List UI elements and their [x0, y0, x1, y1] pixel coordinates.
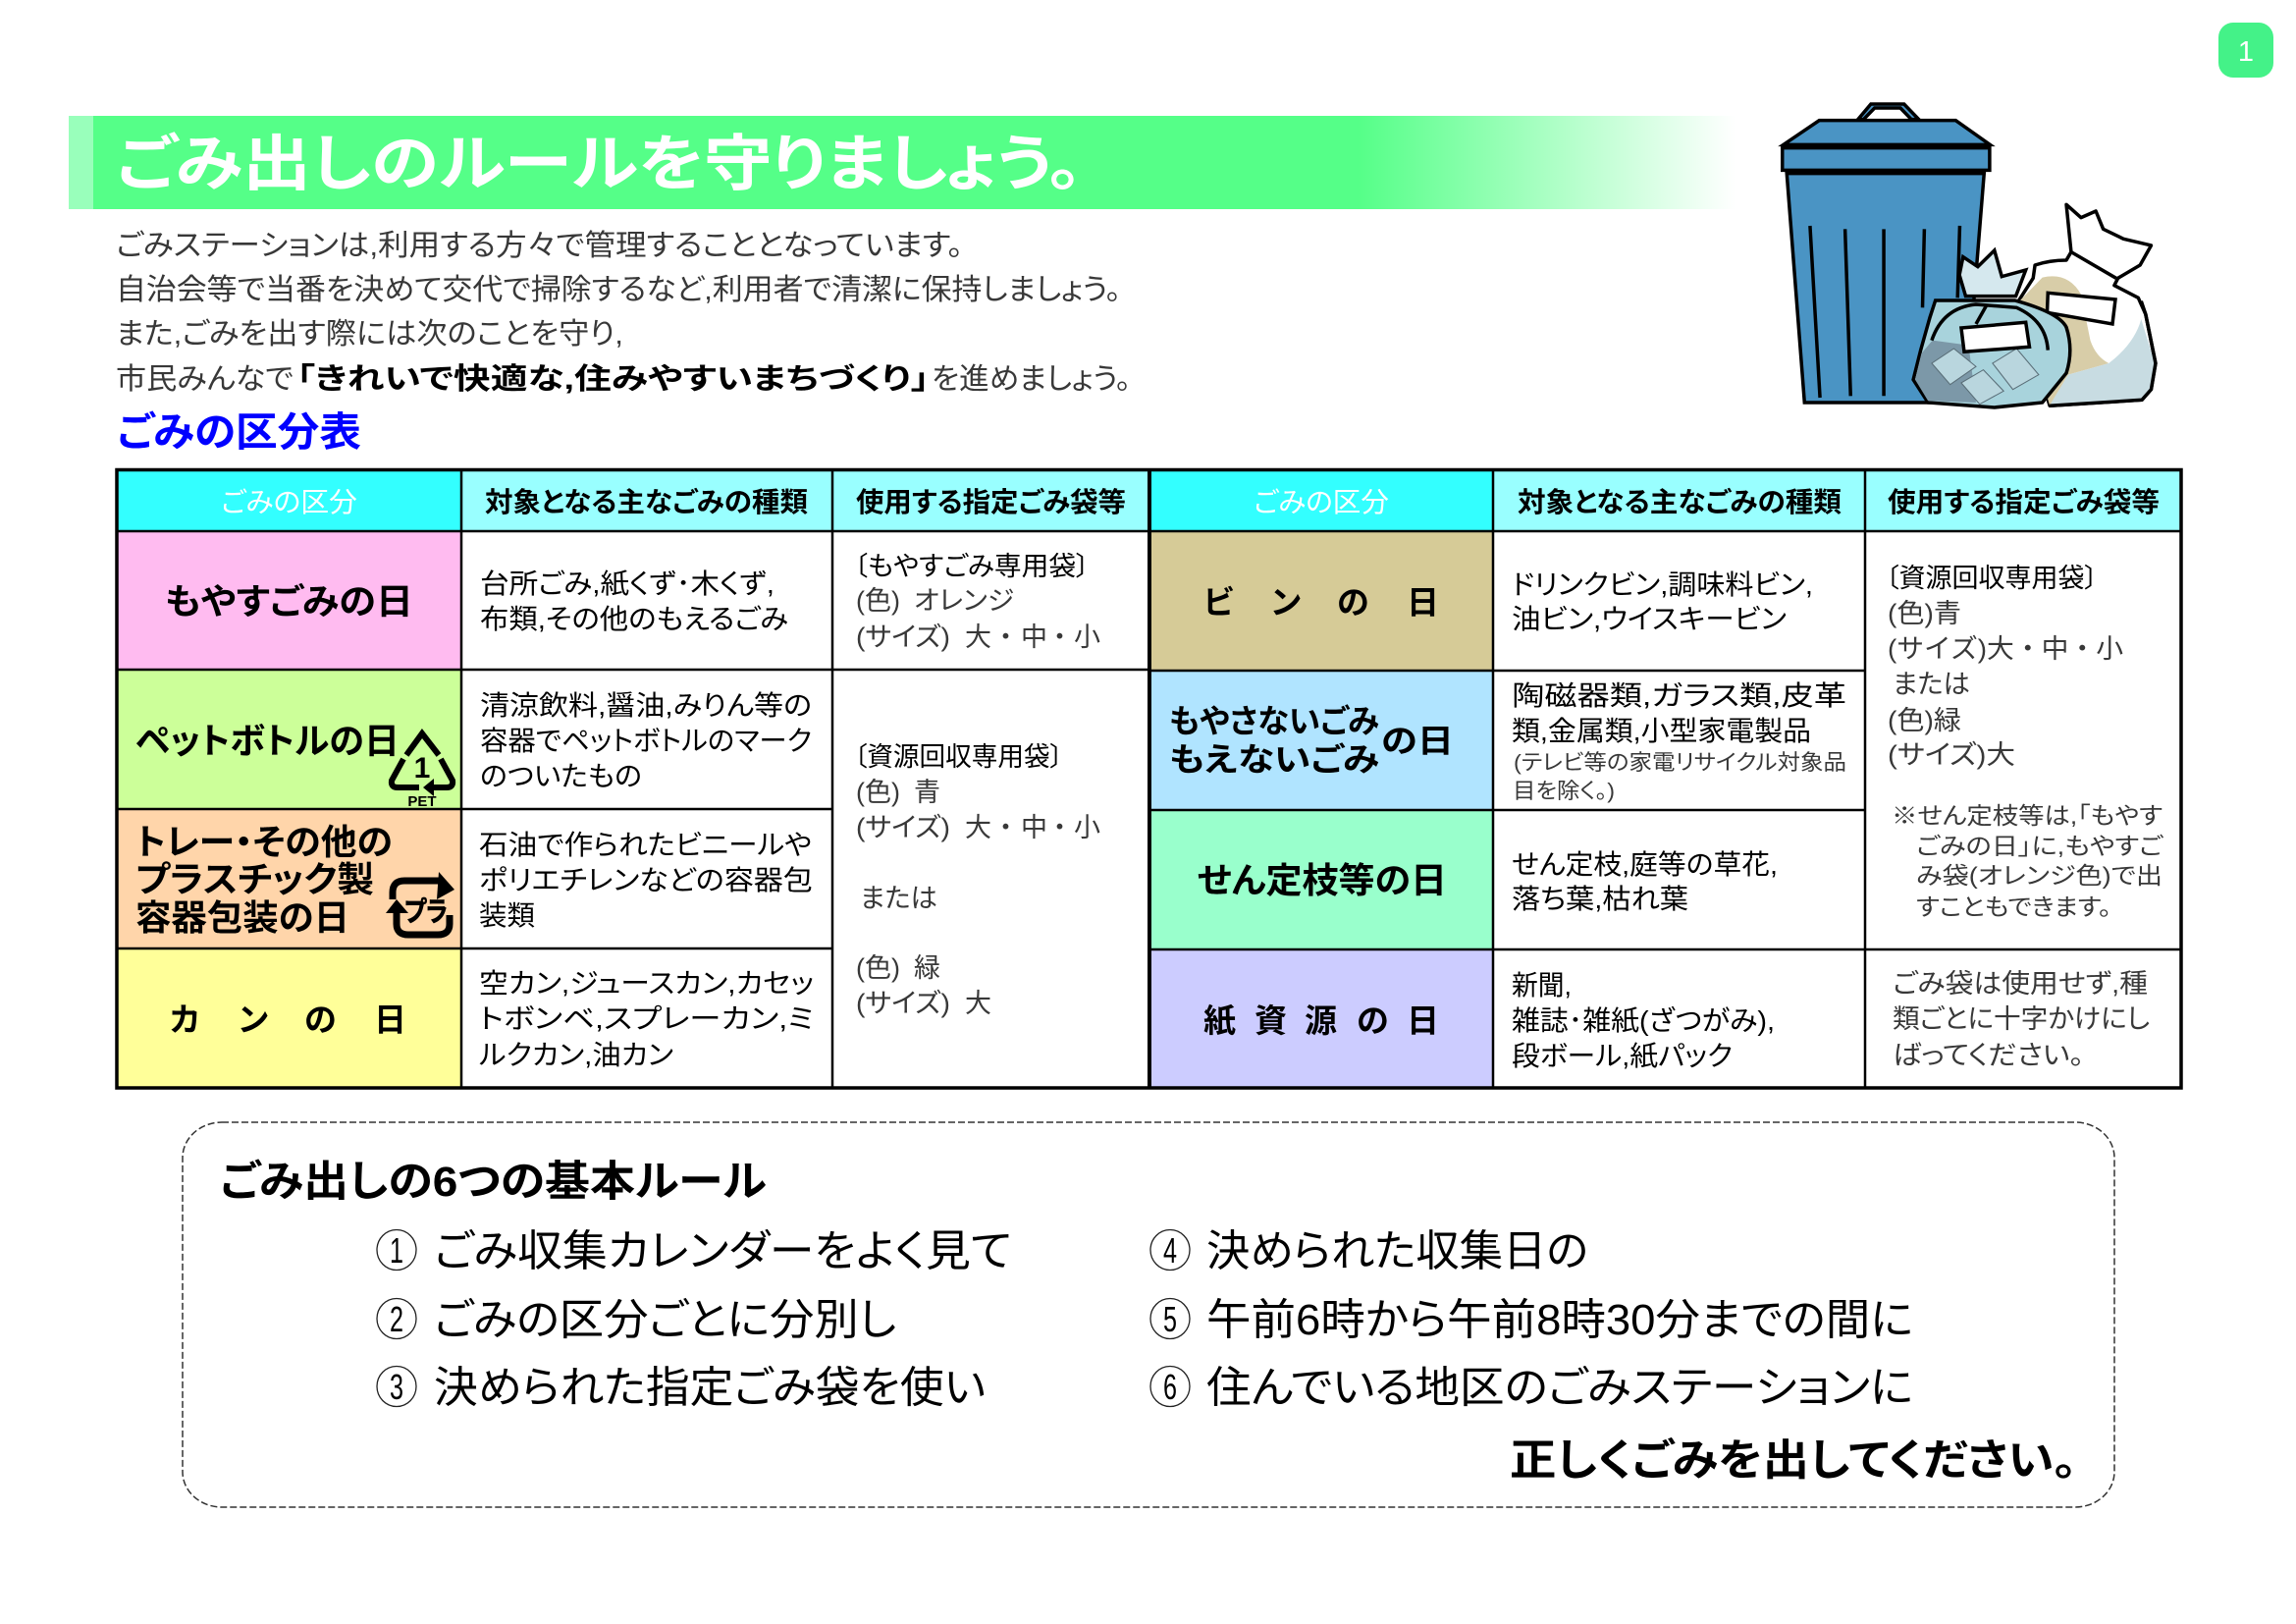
- intro paragraph: また,ごみを出す際には次のことを守り,: [116, 318, 623, 351]
- right item descriptions: 陶磁器類,ガラス類,皮革: [1512, 680, 1846, 711]
- rule 6: 住んでいる地区のごみステーションに: [1206, 1364, 1913, 1412]
- icon: PET recycling mark: PET: [407, 793, 437, 810]
- category: plastic containers: プラスチック製: [135, 859, 374, 899]
- note on pruned branches: ごみの日」に,もやすご: [1916, 834, 2164, 860]
- right designated bags: (サイズ)大・中・小: [1888, 634, 2123, 664]
- left designated bags: または: [860, 884, 937, 913]
- right item descriptions: (テレビ等の家電リサイクル対象品: [1514, 750, 1846, 775]
- left item descriptions: ルクカン,油カン: [479, 1040, 673, 1070]
- rule 5: 午前6時から午前8時30分までの間に: [1206, 1296, 1913, 1344]
- paper bundling note: ばってください。: [1893, 1041, 2084, 1070]
- paper bundling note: 類ごとに十字かけにし: [1893, 1004, 2150, 1034]
- left item descriptions: 清涼飲料,醤油,みりん等の: [480, 690, 812, 721]
- panel: left category table: [117, 469, 1149, 1088]
- category: cans: [117, 948, 461, 1088]
- right item descriptions: せん定枝,庭等の草花,: [1512, 849, 1778, 880]
- icon: trash can and garbage bags: [1783, 104, 2156, 407]
- header row right: ごみの区分: [1254, 487, 1389, 517]
- left designated bags: 緑: [914, 953, 940, 983]
- right item descriptions: 油ビン,ウイスキービン: [1512, 604, 1787, 634]
- icon: PET recycling mark: 1: [414, 752, 430, 785]
- category: non-burnable: もやさないごみ: [1169, 703, 1379, 739]
- left item descriptions: 布類,その他のもえるごみ: [480, 604, 788, 634]
- page number badge: [2218, 23, 2273, 78]
- page number badge: 1: [2238, 36, 2254, 68]
- right item descriptions: 目を除く。): [1513, 779, 1615, 803]
- right designated bags: (サイズ)大: [1888, 740, 2015, 770]
- right item descriptions: [1512, 569, 1846, 1071]
- left item descriptions: [479, 568, 814, 1070]
- rule 2: 2: [390, 1299, 403, 1339]
- header row right: 対象となる主なごみの種類: [1518, 486, 1842, 517]
- header row left: [117, 469, 1149, 531]
- header row left: 使用する指定ごみ袋等: [856, 486, 1126, 517]
- intro paragraph: 「きれいで快適な,住みやすいまちづくり」: [296, 363, 930, 396]
- icon: plastic recycling mark: [386, 872, 454, 935]
- title banner: [69, 116, 1735, 209]
- category: non-burnable: もえないごみ: [1169, 741, 1379, 778]
- right item descriptions: ドリンクビン,調味料ビン,: [1512, 569, 1813, 600]
- right item descriptions: 雑誌･雑紙(ざつがみ),: [1512, 1005, 1775, 1036]
- category: non-burnable: [1149, 671, 1493, 810]
- left item descriptions: 石油で作られたビニールや: [479, 830, 812, 860]
- category: paper resources: 紙資源の日: [1203, 1002, 1439, 1039]
- intro paragraph: [116, 230, 1131, 396]
- left designated bags: 〔もやすごみ専用袋〕: [854, 552, 1090, 581]
- category: paper resources: [1149, 949, 1493, 1088]
- category: non-burnable: の日: [1381, 723, 1454, 759]
- category: plastic containers: トレー・その他の: [135, 822, 393, 862]
- rule 3: 決められた指定ごみ袋を使い: [434, 1364, 986, 1412]
- header row right: [1149, 469, 2181, 531]
- category: PET bottles: [117, 670, 461, 810]
- header row left: 対象となる主なごみの種類: [485, 486, 808, 517]
- left designated bags: (色): [856, 953, 900, 983]
- left item descriptions: 装類: [479, 900, 535, 931]
- right designated bags: 〔資源回収専用袋〕: [1886, 564, 2098, 593]
- left designated bags: オレンジ: [914, 586, 1014, 616]
- left designated bags: (色): [856, 586, 900, 616]
- category: plastic containers: [117, 809, 461, 948]
- left item descriptions: のついたもの: [480, 761, 642, 791]
- rule 1: 1: [390, 1230, 403, 1271]
- note on pruned branches: すこともできます。: [1916, 894, 2111, 921]
- category: PET bottles: ペットボトルの日: [135, 721, 400, 761]
- category: pruned branches: せん定枝等の日: [1198, 860, 1447, 900]
- category: bottles: ビンの日: [1203, 584, 1439, 621]
- rule 1: ごみ収集カレンダーをよく見て: [434, 1227, 1012, 1275]
- left item descriptions: 台所ごみ,紙くず･木くず,: [480, 568, 774, 599]
- intro paragraph: ごみステーションは,利用する方々で管理することとなっています。: [116, 230, 963, 262]
- closing line: 正しくごみを出してください。: [1510, 1436, 2077, 1485]
- category: bottles: [1149, 531, 1493, 671]
- left designated bags: 大・中・小: [965, 813, 1100, 842]
- right item descriptions: 新聞,: [1512, 970, 1572, 1001]
- rules heading: ごみ出しの6つの基本ルール: [220, 1159, 767, 1206]
- right designated bags: [1886, 564, 2164, 1070]
- note on pruned branches: ※せん定枝等は,「もやす: [1892, 803, 2163, 830]
- left designated bags: 青: [914, 778, 940, 807]
- left designated bags: [854, 552, 1100, 1018]
- left designated bags: 大・中・小: [965, 623, 1100, 652]
- right item descriptions: 段ボール,紙パック: [1512, 1041, 1733, 1071]
- title banner: ごみ出しのルールを守りましょう。: [116, 131, 1083, 198]
- paper bundling note: ごみ袋は使用せず,種: [1893, 969, 2148, 999]
- rule 6: 6: [1163, 1367, 1177, 1407]
- icon: plastic recycling mark: プラ: [404, 896, 448, 927]
- left item descriptions: 空カン,ジュースカン,カセッ: [479, 968, 814, 999]
- header row left: ごみの区分: [221, 487, 357, 517]
- panel: right category table: [1149, 469, 2181, 1088]
- left designated bags: 〔資源回収専用袋〕: [854, 742, 1063, 772]
- category: burnable: [117, 531, 461, 670]
- icon: PET recycling mark: [392, 733, 453, 810]
- left item descriptions: 容器でペットボトルのマーク: [480, 726, 812, 756]
- intro paragraph: 自治会等で当番を決めて交代で掃除するなど,利用者で清潔に保持しましょう。: [116, 274, 1121, 306]
- panel: six basic rules: [183, 1122, 2114, 1507]
- note on pruned branches: み袋(オレンジ色)で出: [1916, 863, 2163, 890]
- rule 4: 決められた収集日の: [1206, 1227, 1588, 1275]
- right item descriptions: 落ち葉,枯れ葉: [1512, 884, 1688, 914]
- header row right: 使用する指定ごみ袋等: [1888, 486, 2160, 517]
- paper bundling note: [1893, 969, 2150, 1070]
- note on pruned branches: [1892, 803, 2164, 921]
- intro paragraph: を進めましょう。: [932, 363, 1131, 396]
- category: plastic containers: 容器包装の日: [135, 897, 349, 938]
- left designated bags: (サイズ): [856, 813, 950, 842]
- rule 5: 5: [1163, 1299, 1177, 1339]
- left item descriptions: トボンベ,スプレーカン,ミ: [479, 1003, 814, 1034]
- rule 3: 3: [390, 1367, 403, 1407]
- category: pruned branches: [1149, 810, 1493, 949]
- heading: waste category table: ごみの区分表: [117, 409, 361, 455]
- intro paragraph: 市民みんなで: [116, 363, 294, 396]
- left designated bags: (色): [856, 778, 900, 807]
- right designated bags: (色)緑: [1888, 706, 1961, 735]
- left designated bags: (サイズ): [856, 623, 950, 652]
- rule 2: ごみの区分ごとに分別し: [434, 1296, 896, 1344]
- left item descriptions: ポリエチレンなどの容器包: [479, 865, 813, 895]
- right designated bags: または: [1893, 670, 1970, 699]
- left designated bags: (サイズ): [856, 989, 950, 1018]
- category: burnable: もやすごみの日: [165, 581, 413, 622]
- category: cans: カンの日: [170, 1001, 406, 1038]
- right designated bags: (色)青: [1888, 599, 1961, 628]
- right item descriptions: 類,金属類,小型家電製品: [1512, 716, 1811, 746]
- left designated bags: 大: [965, 989, 991, 1018]
- rule 4: 4: [1163, 1230, 1177, 1271]
